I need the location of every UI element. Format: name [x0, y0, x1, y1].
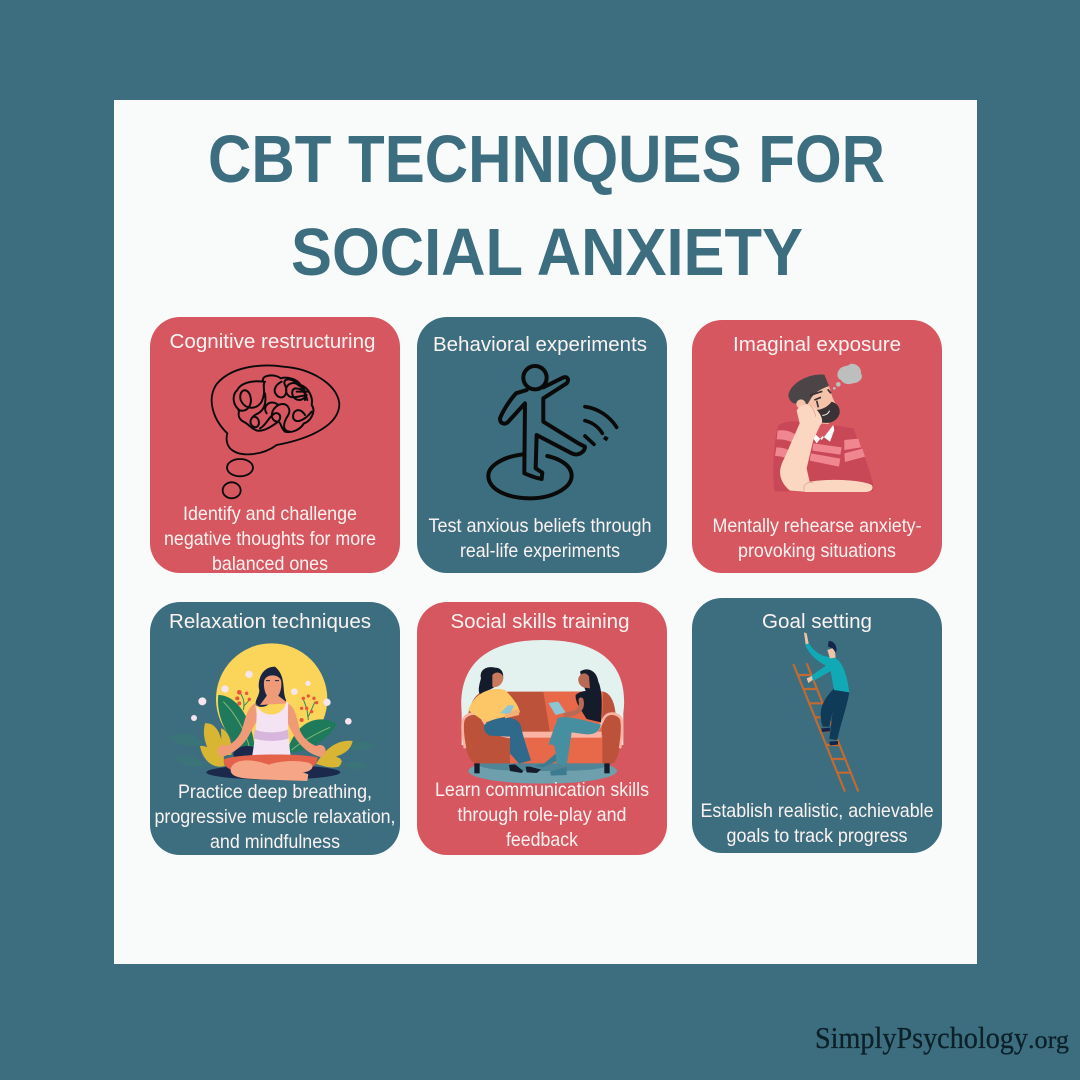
description: behavioral experiments: real-life experiments [460, 540, 620, 562]
panel: relaxation techniques [150, 602, 400, 855]
description: goal setting: goals to track progress [726, 825, 908, 847]
heading: behavioral experiments: Behavioral experiments [433, 333, 647, 356]
heading: imaginal exposure: Imaginal exposure [733, 333, 901, 356]
footer: source credit: .org [1028, 1027, 1070, 1054]
title: SOCIAL ANXIETY [291, 215, 803, 290]
description: imaginal exposure [712, 515, 922, 562]
illustration: two women talking on a sofa [461, 640, 624, 784]
description: goal setting [700, 800, 934, 847]
illustration: thoughtful man [773, 364, 873, 492]
panel: behavioral experiments [417, 317, 667, 573]
heading: goal setting: Goal setting [762, 610, 872, 633]
heading: social skills training: Social skills training [450, 610, 630, 633]
description: social skills training [435, 779, 649, 851]
title: CBT TECHNIQUES FOR [208, 122, 885, 197]
heading: cognitive restructuring: Cognitive restructuring [170, 330, 376, 353]
illustration: man climbing a ladder [793, 632, 858, 792]
description: behavioral experiments: Test anxious beliefs through [428, 515, 652, 537]
panel: social skills training [417, 602, 667, 855]
description: social skills training: Learn communication skills [435, 779, 649, 801]
description: imaginal exposure: Mentally rehearse anxiety- [712, 515, 922, 537]
panel: goal setting [692, 598, 942, 853]
description: relaxation techniques: and mindfulness [210, 831, 340, 853]
description: cognitive restructuring: balanced ones [212, 553, 328, 575]
icon: figure kicking on a circle [488, 366, 617, 498]
description: social skills training: through role-play and [458, 804, 626, 826]
description: cognitive restructuring: negative thoughts for more [164, 528, 376, 550]
white panel [114, 100, 977, 964]
description: cognitive restructuring: Identify and challenge [183, 503, 357, 525]
description: social skills training: feedback [506, 829, 578, 851]
panel: imaginal exposure [692, 320, 942, 573]
title [208, 122, 885, 290]
illustration: woman meditating [168, 643, 377, 781]
description: cognitive restructuring [164, 503, 376, 575]
heading: relaxation techniques: Relaxation techniques [169, 610, 371, 633]
description: goal setting: Establish realistic, achievable [700, 800, 934, 822]
description: behavioral experiments [428, 515, 652, 562]
description: relaxation techniques: progressive muscle relaxation, [154, 806, 396, 828]
panel: cognitive restructuring [150, 317, 400, 575]
description: relaxation techniques [154, 781, 396, 853]
description: relaxation techniques: Practice deep breathing, [178, 781, 372, 803]
description: imaginal exposure: provoking situations [738, 540, 896, 562]
icon: thought bubble with tangled brain [212, 366, 339, 498]
footer: source credit: SimplyPsychology [815, 1020, 1028, 1055]
